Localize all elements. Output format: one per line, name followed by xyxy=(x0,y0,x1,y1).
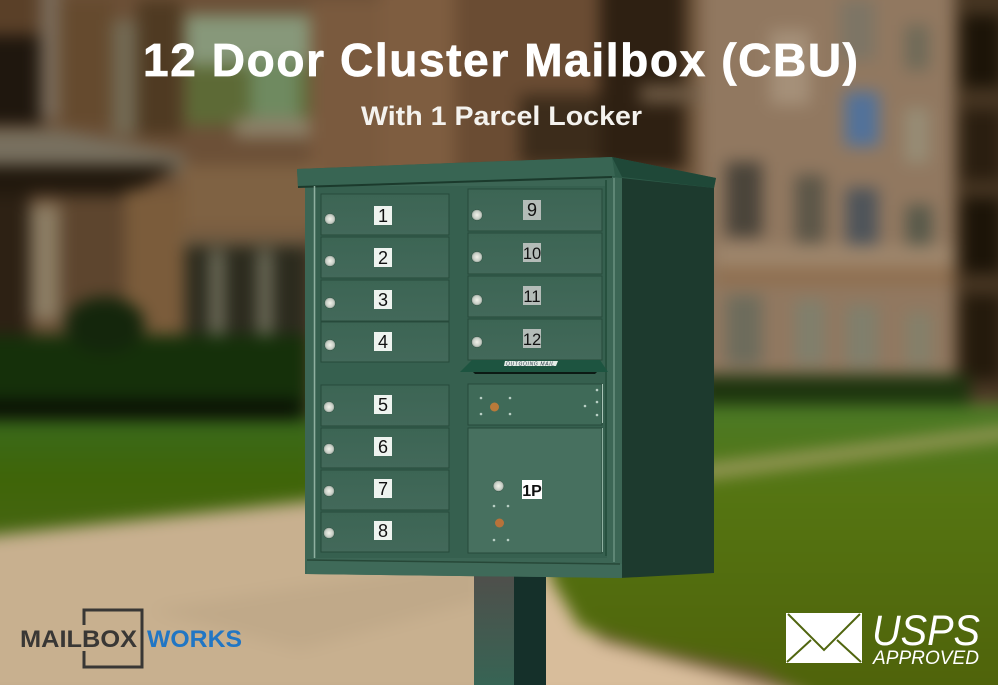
logo: Mailbox Works: WORKS xyxy=(147,626,242,653)
doors 1-4 xyxy=(321,194,449,362)
door numbers: 8 xyxy=(378,521,388,541)
right lawn xyxy=(550,405,998,685)
subtitle: With 1 Parcel Locker xyxy=(361,101,643,131)
door numbers: 2 xyxy=(378,248,388,268)
left building xyxy=(0,0,380,380)
logo: USPS Approved xyxy=(786,607,980,669)
logo: USPS Approved: APPROVED xyxy=(872,648,979,669)
door numbers: 3 xyxy=(378,290,388,310)
outgoing mail slot: OUTGOING MAIL xyxy=(506,362,554,368)
locks xyxy=(324,210,504,538)
outgoing mail panel xyxy=(468,384,602,425)
cabinet side panel xyxy=(620,176,714,578)
door numbers: 5 xyxy=(378,395,388,415)
right building xyxy=(700,0,998,400)
envelope icon xyxy=(786,613,862,663)
door numbers: 4 xyxy=(378,332,388,352)
parcel locker door xyxy=(468,428,602,553)
outgoing mail slot xyxy=(460,360,608,374)
title: 12 Door Cluster Mailbox (CBU) xyxy=(143,34,858,86)
logo: Mailbox Works: MAILBOX xyxy=(20,626,137,653)
door numbers: 1P xyxy=(522,483,542,500)
door numbers: 10 xyxy=(523,245,541,263)
number labels xyxy=(374,206,392,540)
cluster mailbox unit xyxy=(297,157,716,578)
door numbers: 12 xyxy=(523,331,541,349)
mailbox post xyxy=(474,575,546,685)
cabinet front xyxy=(305,176,622,578)
door numbers: 6 xyxy=(378,437,388,457)
door numbers: 1 xyxy=(378,206,388,226)
doors 5-8 xyxy=(321,385,449,552)
centre building xyxy=(380,0,715,380)
door numbers xyxy=(378,200,542,541)
doors 9-12 xyxy=(468,189,602,360)
path xyxy=(0,500,560,685)
left lawn xyxy=(0,420,320,537)
roof xyxy=(297,157,716,188)
door numbers: 11 xyxy=(523,288,541,306)
logo: Mailbox Works xyxy=(20,610,242,667)
hedges xyxy=(0,297,970,422)
door numbers: 7 xyxy=(378,479,388,499)
door numbers: 9 xyxy=(527,200,537,220)
logo: USPS Approved: USPS xyxy=(872,607,980,655)
